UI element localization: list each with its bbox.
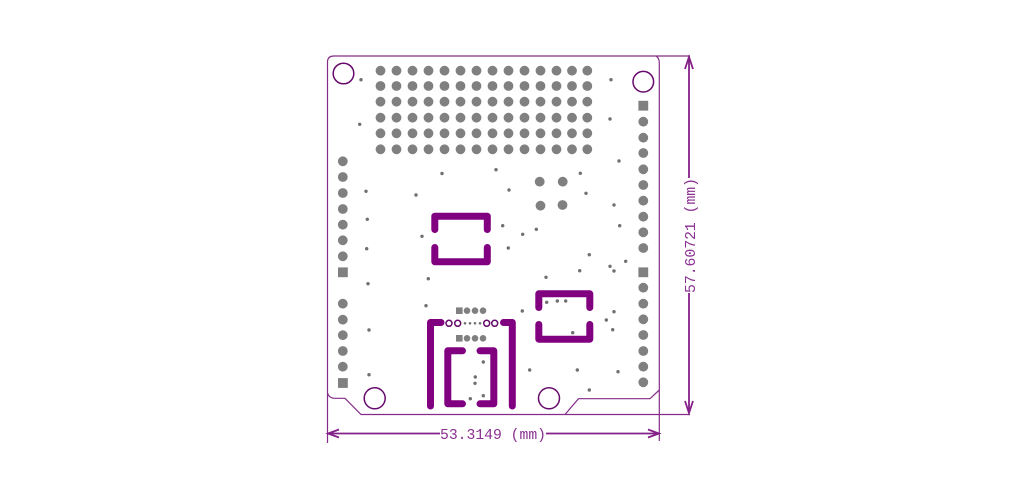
right connector footprint [539,294,590,339]
mounting holes [333,63,654,409]
small vias [358,78,627,400]
vertical dimension label: 57.60721 (mm) [684,178,700,293]
right header pads [638,101,648,387]
upper connector footprint [435,216,487,262]
lower footprint inner bracket [448,351,494,404]
left header pads [338,156,348,388]
pad grid [376,66,592,154]
lower footprint outer bracket [430,322,512,406]
board outline [328,56,690,443]
four large pads [535,177,568,211]
small connector pads [446,307,498,342]
vertical dimension arrow [685,57,693,413]
horizontal dimension label: 53.3149 (mm) [440,428,546,444]
horizontal dimension arrow [328,430,659,438]
